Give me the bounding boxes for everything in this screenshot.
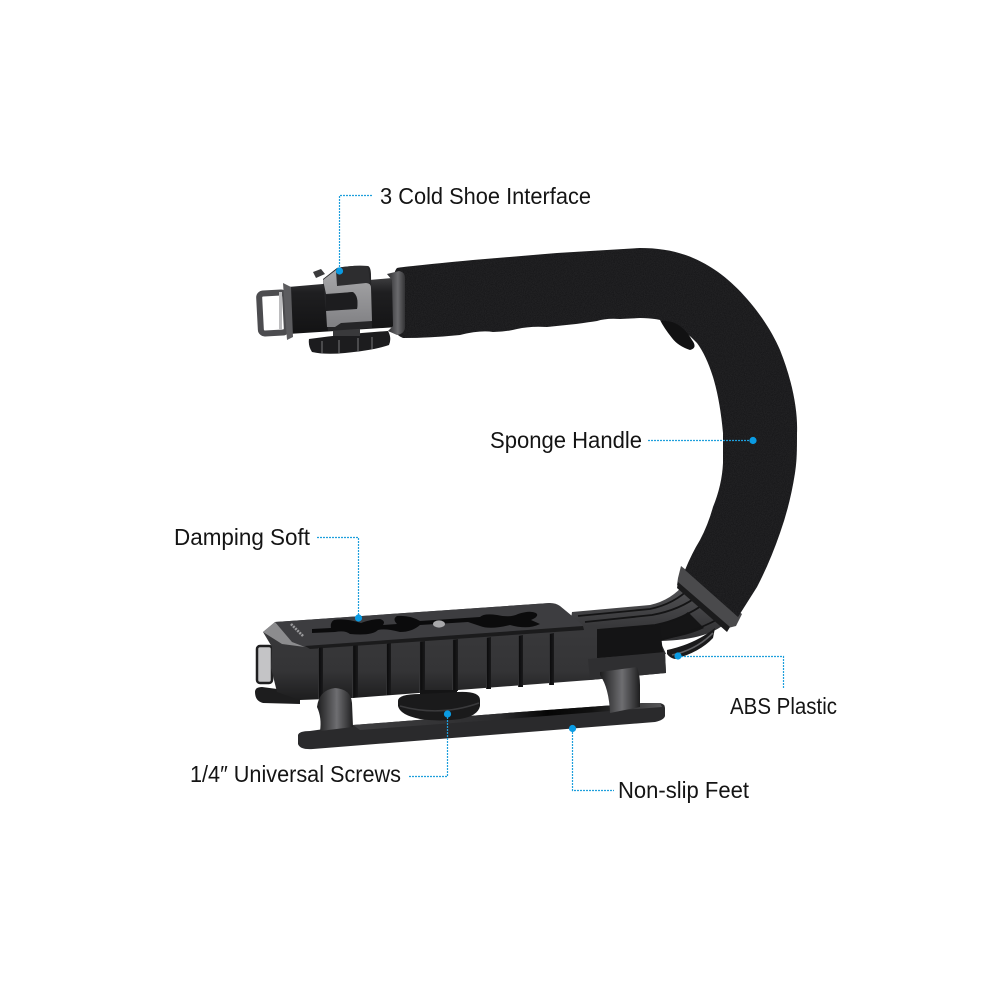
callout: 1/4" Universal Screws	[190, 710, 451, 787]
handle collar	[677, 566, 742, 628]
base side fin	[255, 687, 300, 704]
plate light bevel	[263, 622, 305, 647]
callout: 3 Cold Shoe Interface: 3 Cold Shoe Interface	[380, 183, 591, 209]
callout: Damping Soft: Damping Soft	[174, 524, 311, 550]
top plate	[275, 603, 583, 646]
steel shoe plate	[323, 270, 372, 327]
callout: 3 Cold Shoe Interface	[336, 183, 591, 275]
plate front edge	[305, 626, 584, 649]
loop bracket	[259, 292, 287, 334]
shoe block	[323, 266, 372, 331]
cylinder	[288, 278, 398, 334]
brand mark	[291, 624, 303, 636]
product: video stabilizer handle	[255, 248, 797, 749]
sponge handle foam	[394, 248, 797, 617]
curved neck joining handle to base	[570, 566, 742, 662]
knob	[309, 331, 390, 354]
base plate	[255, 603, 666, 704]
callout: Damping Soft	[174, 524, 362, 622]
cold shoe clamp assembly	[259, 266, 405, 354]
callout: ABS Plastic: ABS Plastic	[730, 693, 837, 719]
main body	[263, 603, 666, 700]
center screw	[433, 620, 445, 628]
handle end collar	[387, 271, 405, 335]
mounting slots	[312, 612, 540, 634]
ribs	[318, 633, 554, 699]
callout: 1/4" Universal Screws: 1/4″ Universal Screws	[190, 761, 401, 787]
left foot tab	[317, 688, 353, 731]
ABS plastic underside	[667, 628, 715, 659]
lower body recess	[597, 626, 663, 658]
feet plate top face	[353, 703, 662, 730]
callout: ABS Plastic	[674, 652, 837, 719]
feet plate	[298, 667, 665, 749]
right foot tab	[600, 667, 640, 713]
callout: Non-slip Feet: Non-slip Feet	[618, 777, 750, 803]
shoe slot	[326, 292, 357, 311]
callout: Sponge Handle: Sponge Handle	[490, 427, 642, 453]
lower step	[588, 652, 666, 680]
callout: Non-slip Feet	[569, 725, 750, 803]
mounting screw knob	[398, 690, 480, 720]
foam grip crease	[660, 320, 695, 350]
side loop	[257, 646, 272, 683]
callout: Sponge Handle	[490, 427, 757, 453]
bracket flange	[283, 283, 293, 340]
